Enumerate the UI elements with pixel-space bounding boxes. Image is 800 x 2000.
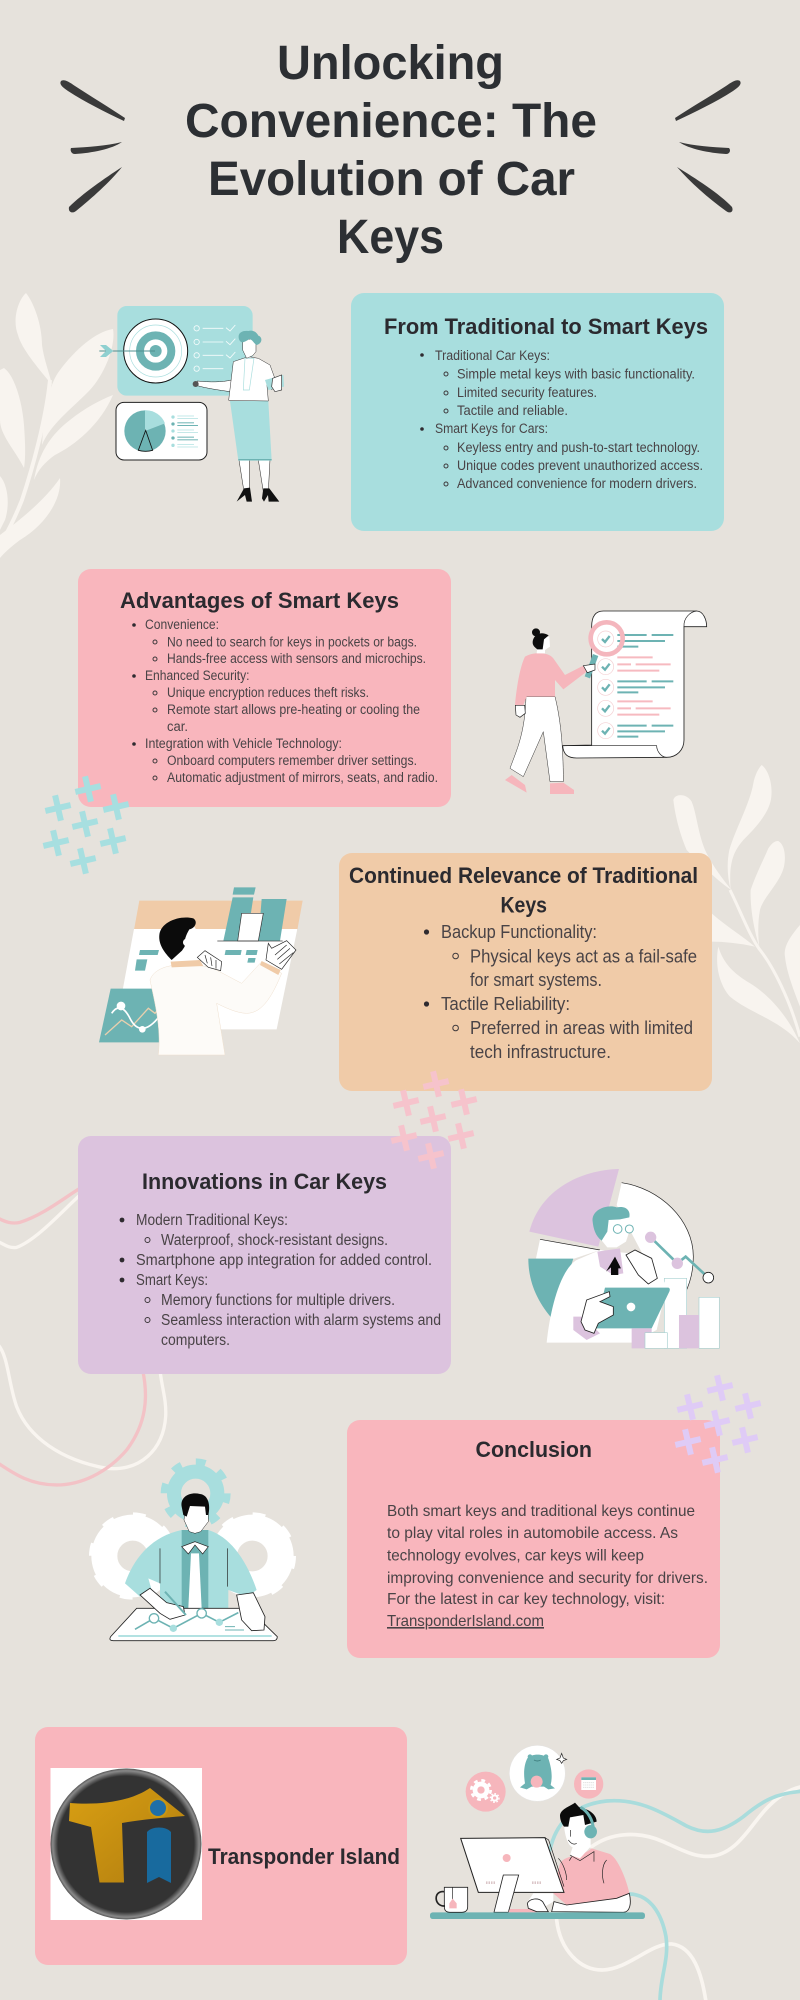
illustration: woman with checklist scroll [505, 611, 707, 794]
conclusion text: TransponderIsland.com [387, 1613, 544, 1630]
bullet list: Unique codes prevent unauthorized access. [457, 458, 703, 473]
panel: innovations in car keys [78, 1136, 451, 1374]
decorative curved lines bottom right [550, 1787, 800, 2000]
bullet list: Backup Functionality: [441, 922, 597, 942]
logo [50, 1768, 202, 1920]
bullet list: Waterproof, shock-resistant designs. [161, 1232, 388, 1249]
conclusion text [387, 1503, 708, 1630]
bullet list: Tactile Reliability: [441, 994, 570, 1014]
bullet list: Remote start allows pre-heating or cooling the [167, 702, 420, 717]
bullet list: Smart Keys for Cars: [435, 421, 548, 436]
title [185, 37, 597, 264]
bullet list: Smart Keys: [136, 1272, 208, 1289]
panel: from traditional to smart keys [351, 293, 724, 531]
decorative plus cluster: teal [40, 773, 132, 877]
bullet list: Seamless interaction with alarm systems and [161, 1312, 441, 1329]
illustration: man studying charts [99, 887, 303, 1055]
title: Convenience: The [185, 95, 597, 148]
bullet list: Integration with Vehicle Technology: [145, 736, 342, 751]
bullet list [424, 922, 697, 1062]
panel: continued relevance of traditional keys [339, 853, 712, 1091]
bullet list: tech infrastructure. [470, 1042, 611, 1062]
bullet list: Memory functions for multiple drivers. [161, 1292, 395, 1309]
heading: From Traditional to Smart Keys [384, 314, 708, 339]
bullet list: Advanced convenience for modern drivers. [457, 476, 697, 491]
bullet list: Limited security features. [457, 385, 597, 400]
heading: Continued Relevance of Traditional [349, 863, 698, 888]
bullet list: Modern Traditional Keys: [136, 1212, 288, 1229]
title: Keys [337, 211, 444, 264]
heading: Innovations in Car Keys [142, 1169, 387, 1194]
panel: conclusion [347, 1420, 720, 1658]
heading: Keys [500, 892, 547, 918]
bullet list: No need to search for keys in pockets or bags. [167, 634, 417, 650]
bullet list [420, 348, 703, 491]
bullet list: Enhanced Security: [145, 668, 250, 683]
bullet list: computers. [161, 1332, 230, 1349]
heading: Conclusion [476, 1437, 592, 1462]
title decoration: right brush strokes [675, 80, 741, 212]
bullet list: for smart systems. [470, 970, 602, 990]
bullet list: Smartphone app integration for added control. [136, 1252, 432, 1269]
bullet list [120, 1212, 441, 1349]
decorative curved lines left [0, 1188, 166, 1485]
decorative leaf top left [0, 293, 113, 558]
decorative leaf right [673, 765, 800, 1043]
illustration: man with tablet and charts [528, 1169, 719, 1348]
bullet list: Preferred in areas with limited [470, 1018, 693, 1038]
illustration: man at desk with gears [94, 1462, 291, 1641]
bullet list [132, 617, 438, 785]
panel: advantages of smart keys [78, 569, 451, 807]
bullet list: Keyless entry and push-to-start technology. [457, 440, 700, 455]
bullet list: Simple metal keys with basic functionality. [457, 366, 695, 382]
heading [349, 863, 698, 918]
bullet list: Unique encryption reduces theft risks. [167, 685, 369, 700]
panel: transponder island brand [35, 1727, 407, 1965]
title decoration: left brush strokes [60, 80, 125, 212]
heading: Advantages of Smart Keys [120, 588, 399, 613]
illustration: woman with target board [99, 306, 284, 502]
decorative plus cluster: lilac [672, 1372, 764, 1476]
bullet list: Hands-free access with sensors and microchips. [167, 651, 426, 666]
conclusion text: technology evolves, car keys will keep [387, 1548, 644, 1564]
bullet list: car. [167, 719, 188, 734]
decorative plus cluster: pink [388, 1068, 480, 1172]
conclusion text: improving convenience and security for drivers. [387, 1570, 708, 1587]
conclusion text: For the latest in car key technology, visit: [387, 1591, 665, 1608]
brand name: Transponder Island [208, 1844, 400, 1869]
bullet list: Tactile and reliable. [457, 403, 568, 418]
bullet list: Automatic adjustment of mirrors, seats, and radio. [167, 770, 438, 785]
bullet list: Convenience: [145, 617, 219, 632]
conclusion text: to play vital roles in automobile access. As [387, 1525, 678, 1542]
title: Unlocking [277, 37, 504, 90]
bullet list: Physical keys act as a fail-safe [470, 946, 697, 966]
conclusion text: Both smart keys and traditional keys continue [387, 1503, 695, 1520]
title: Evolution of Car [208, 153, 575, 206]
bullet list: Traditional Car Keys: [435, 348, 550, 363]
bullet list: Onboard computers remember driver settings. [167, 753, 417, 768]
illustration: man at computer with headphones [430, 1745, 645, 1919]
